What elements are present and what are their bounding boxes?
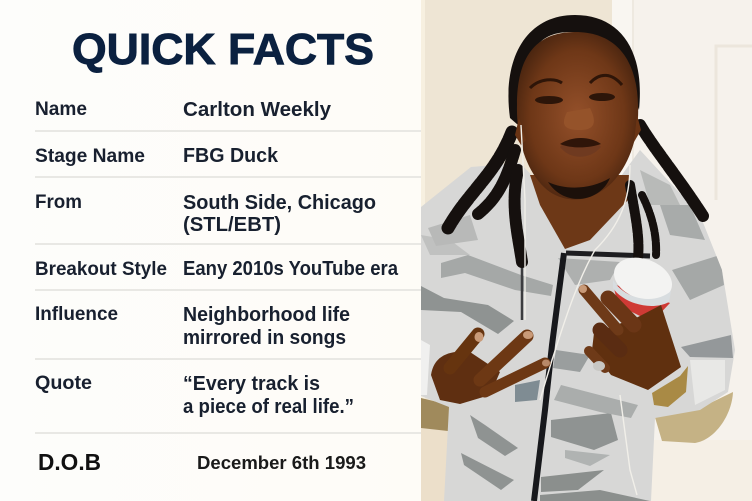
row: from: South Side, Chicago [183,192,376,214]
neck [530,175,630,249]
hoodie zipper [534,253,564,501]
row: quote: a piece of real life.” [183,396,354,418]
hair [508,15,640,125]
row: quote: “Every track is [183,373,320,395]
wall and door background [421,0,752,501]
left hand [431,331,550,404]
row: name: Carlton Weekly [183,99,332,121]
row: stage name [35,145,279,167]
hoodie with camouflage [421,150,735,501]
row: stage name: FBG Duck [183,145,279,167]
row: influence: mirrored in songs [183,327,346,349]
title: QUICK FACTS [72,25,374,74]
panel: quick facts [0,0,421,501]
row: influence: Influence [35,304,118,325]
row: breakout style [35,258,399,280]
row: influence [35,304,350,349]
row: breakout style: Breakout Style [35,259,167,280]
row: from: From [35,192,82,213]
earphone wires [521,125,637,495]
cup [608,250,678,322]
row: influence: Neighborhood life [183,304,350,326]
row: quote [35,373,354,418]
dreadlocks [448,125,703,262]
row: date of birth: December 6th 1993 [197,453,366,473]
row: quote: Quote [35,373,92,394]
right hand [579,285,681,390]
row: name: Name [35,99,87,120]
watch [652,366,688,407]
row: date of birth: D.O.B [38,449,101,475]
face [515,32,641,200]
row: stage name: Stage Name [35,146,145,167]
row: name [35,99,332,121]
row: from [35,192,376,236]
row: date of birth [38,449,366,475]
photo: portrait of the rapper [421,0,752,501]
row: from: (STL/EBT) [183,214,281,236]
row: breakout style: Eany 2010s YouTube era [183,258,399,280]
